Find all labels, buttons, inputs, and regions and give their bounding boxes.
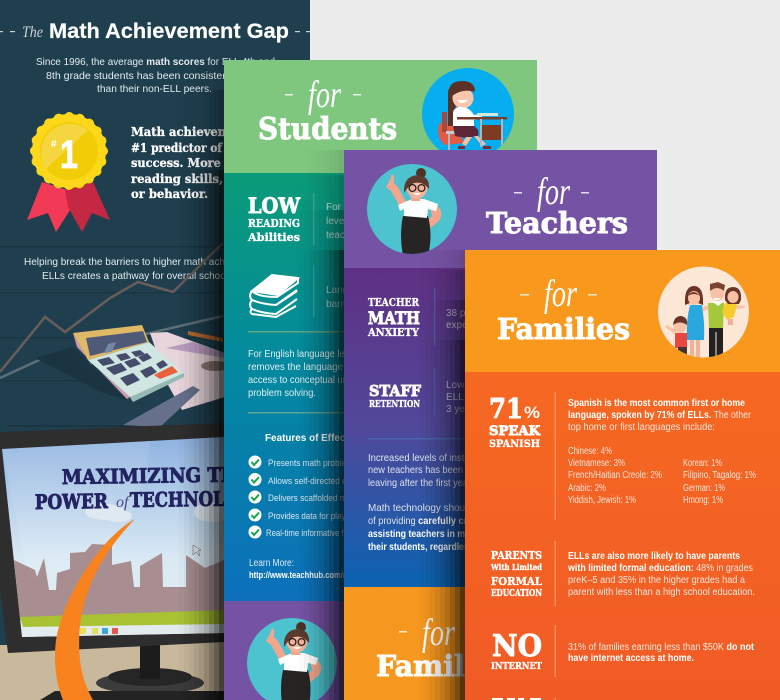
icon: gold medal number one [27,114,110,232]
text: reading: teachers must address both. [326,230,452,241]
paragraphs: of providing carefully crafted instruction, [368,515,542,527]
heading: for students [258,74,397,147]
features heading: Features of Effective Math Technology [265,432,446,444]
icon: gold medal number one: 1 [60,133,78,177]
shadow: families card [420,250,465,700]
text: home languages: Filipino, Tagalog: 1% [683,470,756,481]
heading: for students: Students [258,112,397,147]
arrow: orange swoosh [55,519,135,700]
shadow: teachers card [299,150,344,700]
text: home languages: Arabic: 2% [568,483,606,494]
text: parents education [567,551,755,598]
text: no internet [568,642,755,664]
features checklist [248,456,405,539]
text: language [326,285,451,310]
screen headline [35,462,266,514]
text: language: barriers to math success. [326,299,438,310]
icon: student at desk [422,68,514,150]
label: no internet: INTERNET [491,662,542,672]
text: home languages: top home or first languages include: [568,422,715,433]
label: low reading abilities: Abilities [247,230,300,244]
callout text [131,124,266,201]
paragraphs: their students, regardless of experience. [368,541,534,553]
icon: gold medal number one: # [51,139,57,150]
text: home languages: language, spoken by 71% of ELLs. The other [568,410,752,421]
stat: 71 percent speak spanish: % [524,403,540,422]
text: home languages: French/Haitian Creole: 2% [568,470,662,481]
label: parents with limited formal education: FORMAL [491,575,542,588]
label: teacher math anxiety [367,296,420,339]
text: reading: levels make math word problems [326,216,472,227]
next stat top edge [492,698,556,700]
label: parents with limited formal education: PARENTS [491,549,542,562]
label: staff retention: STAFF [369,382,421,400]
label: low reading abilities: READING [248,217,300,230]
heading: for families: Families [497,312,630,346]
shadow: students card [179,60,224,700]
monitor [0,423,224,700]
stat: 71 percent speak spanish: 71 [489,394,523,425]
intro text: than their non-ELL peers. [97,83,212,95]
label: low reading abilities [247,193,300,244]
features checklist: Allows self-directed exploration [268,476,383,487]
intro text: 8th grade students has been consistently lower [46,70,268,82]
closing text: ELLs creates a pathway for overall school success. [42,270,270,282]
text: home languages: Hmong: 1% [683,495,723,506]
label: parents with limited formal education: EDUCATION [491,589,542,599]
paragraphs: assisting teachers in meeting the needs of [368,528,545,540]
features checklist: Presents math problems visually [268,458,386,469]
paragraphs: Math technology should have the capacity [368,502,554,514]
title: Math Achievement Gap [49,20,289,43]
panel: math achievement gap [0,0,310,700]
heading: for families partial [376,612,510,683]
text: reading: For many students, low reading [326,202,466,213]
icon: teacher [367,164,457,256]
icon: calculator and papers [35,325,229,427]
text: parents education: ELLs are also more likely to have parents [568,551,740,562]
label: teacher math anxiety: TEACHER [368,296,420,309]
paragraph: problem solving. [248,387,316,399]
label: no internet: NO [492,629,542,664]
callout text: reading skills, [131,171,223,186]
screen headline: of [116,494,131,511]
icon: teacher [247,618,337,700]
label: parents with limited formal education: With Limited [490,563,542,573]
paragraph: For English language learners, math technology [248,348,444,360]
text: home languages: Korean: 1% [683,458,722,469]
label: parents with limited formal education [490,549,542,599]
paragraph: access to conceptual understanding and supports [248,374,453,386]
text: staff retention: Low-income [446,380,500,391]
icon: family [658,266,749,358]
learn more: Learn More: [249,558,294,569]
features checklist: Provides data for players and teachers [268,511,405,522]
text: math anxiety: experienced [446,320,500,331]
callout text: #1 predictor of [131,140,223,155]
text: parents education: with limited formal education: 48% in grades [567,563,753,574]
closing text [24,256,280,282]
text: reading [326,202,472,241]
text: staff retention: ELL schools [446,392,500,403]
label: staff retention: RETENTION [369,400,420,410]
learn more [249,558,379,581]
text: no internet: 31% of families earning less than $50K do not [568,642,755,653]
panel: for families [465,250,780,700]
heading: for teachers: for [537,171,570,213]
intro text [36,56,275,95]
label: teacher math anxiety: ANXIETY [367,326,419,339]
heading: for families [497,273,630,346]
paragraphs [368,452,558,553]
text: home languages: Yiddish, Jewish: 1% [568,495,636,506]
stat: 71 percent speak spanish: SPEAK [489,424,541,439]
text: home languages: Spanish is the most common first or home [568,398,745,409]
panel: for students [224,60,537,700]
screen headline: MAXIMIZING THE [62,462,252,489]
text: home languages: Chinese: 4% [568,446,612,457]
paragraph [248,348,457,399]
paragraph: removes the language barrier and provides direct [248,361,457,373]
features checklist: Delivers scaffolded math instruction [268,493,398,504]
heading: for families partial: Families [376,649,510,683]
text: home languages [568,398,756,506]
title: The [22,24,43,41]
paragraphs: Increased levels of instructional support for [368,452,548,464]
text: staff retention [446,380,500,415]
closing text: Helping break the barriers to higher math achievement for [24,256,280,268]
heading: for teachers [486,171,628,240]
line chart [0,243,223,378]
label: staff retention [369,382,421,410]
text: home languages: German: 1% [683,483,725,494]
heading: for students: for [308,74,341,116]
text: no internet: have internet access at home. [568,653,694,664]
text: language: Language can be one of the [326,285,451,296]
features checklist: Real-time informative feedback [266,528,373,539]
paragraphs: leaving after the first year of teaching. [368,477,521,489]
heading: for teachers: Teachers [486,206,628,240]
text: math anxiety [446,308,505,331]
label: low reading abilities: LOW [248,193,300,218]
heading: for families partial: for [422,612,455,654]
text: home languages: Vietnamese: 3% [568,458,625,469]
learn more: http://www.teachhub.com/math-tech [249,570,379,581]
callout text: success. More than [131,155,254,170]
text: staff retention: 3 years [446,404,479,415]
text: math anxiety: 38 percent of [446,308,505,319]
text: parents education: parent with less than a high school education. [568,587,755,598]
paragraphs: new teachers has been shown to reduce those [368,464,558,476]
callout text: or behavior. [131,186,208,201]
screen headline: POWER [35,489,108,514]
screen headline: TECHNOLOGY [130,486,266,512]
label: teacher math anxiety: MATH [368,309,420,329]
icon: books [250,275,298,317]
stat: 71 percent speak spanish [489,394,541,450]
panel: for teachers [344,150,657,700]
intro text: Since 1996, the average math scores for ELL 4th and [36,56,275,68]
stat: 71 percent speak spanish: SPANISH [489,439,540,450]
text: parents education: preK–5 and 35% in the higher grades had a [568,575,745,586]
heading: for families: for [544,273,577,315]
callout text: Math achievement is [131,124,266,139]
